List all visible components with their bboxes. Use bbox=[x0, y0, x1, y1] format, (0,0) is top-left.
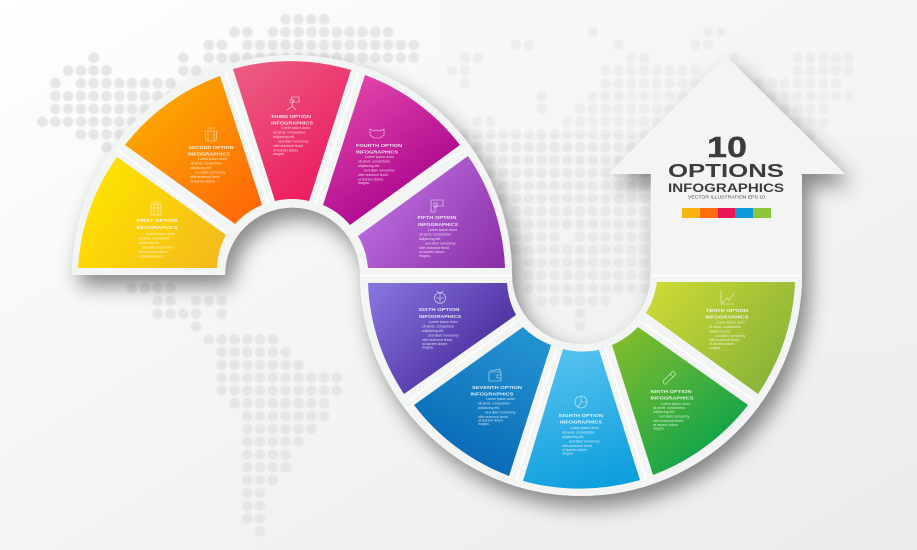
heading: sixth option: SIXTH OPTION bbox=[418, 307, 460, 312]
heading: seventh option bbox=[470, 385, 523, 396]
body text: ninth option: adipiscing elit, bbox=[653, 410, 675, 414]
heading: eighth option: INFOGRAPHICS bbox=[560, 420, 602, 424]
heading: second option: INFOGRAPHICS bbox=[188, 152, 230, 156]
body text: sixth option: magna. bbox=[422, 346, 434, 350]
body text: eighth option: nibh euismod tincid bbox=[562, 444, 592, 448]
body text: ninth option: ut laoreet dolore bbox=[653, 423, 678, 427]
body text: first option: adipiscing elit, bbox=[138, 241, 160, 245]
body text: eighth option: magna. bbox=[562, 452, 574, 456]
heading: tenth option: INFOGRAPHICS bbox=[706, 314, 748, 320]
body text: ninth option: nibh euismod tincid bbox=[653, 419, 683, 423]
heading: third option: INFOGRAPHICS bbox=[271, 120, 313, 126]
body text: first option: nibh euismod tincid bbox=[138, 250, 168, 254]
heading: fourth option: FOURTH OPTION bbox=[356, 143, 403, 148]
panel: sixth option bbox=[368, 283, 516, 394]
body text: seventh option: ut laoreet dolore bbox=[478, 418, 503, 422]
body text: third option: nibh euismod tincid bbox=[273, 144, 303, 148]
body text: seventh option: sit amet, consectetur bbox=[478, 402, 511, 406]
body text: first option: Lorem ipsum dolor bbox=[146, 232, 176, 236]
panel: seventh option bbox=[414, 327, 551, 476]
heading: ninth option: NINTH OPTION bbox=[650, 389, 692, 394]
heading: first option: FIRST OPTION bbox=[136, 218, 178, 223]
heading: seventh option: INFOGRAPHICS bbox=[470, 392, 514, 396]
body text: fifth option: adipiscing elit, bbox=[419, 237, 441, 241]
body text: fourth option: magna. bbox=[358, 181, 370, 185]
body text: tenth option: Lorem ipsum dolor bbox=[716, 320, 746, 324]
body text: first option: ut laoreet dolore bbox=[138, 254, 163, 258]
panel: tenth option bbox=[646, 282, 795, 394]
body text: sixth option: nibh euismod tincid bbox=[422, 338, 452, 342]
heading: second option: SECOND OPTION bbox=[188, 145, 234, 150]
body text: eighth option: adipiscing elit, bbox=[562, 435, 584, 439]
body text: tenth option: nibh euismod tincid bbox=[709, 338, 739, 342]
body text: seventh option: nibh euismod tincid bbox=[478, 415, 508, 419]
body text: third option: Lorem ipsum dolor bbox=[281, 126, 311, 130]
icon: sixth option bbox=[434, 291, 446, 304]
body text: tenth option: ut laoreet dolore bbox=[709, 342, 734, 346]
body text: third option: ut laoreet dolore bbox=[273, 148, 298, 152]
body text: sixth option: adipiscing elit, bbox=[422, 329, 444, 333]
body text: ninth option: magna. bbox=[653, 426, 665, 430]
heading: third option: THIRD OPTION bbox=[271, 114, 312, 119]
heading: fourth option bbox=[356, 143, 403, 154]
body text: third option: sed diam nonummy bbox=[278, 140, 309, 144]
body text: fifth option: nibh euismod tincid bbox=[419, 246, 449, 250]
heading: third option bbox=[271, 114, 313, 126]
icon: first option bbox=[151, 202, 161, 215]
body text: ninth option: Lorem ipsum dolor bbox=[661, 402, 691, 406]
body text: eighth option: Lorem ipsum dolor bbox=[570, 426, 600, 430]
caption: vector illustration: VECTOR ILLUSTRATION EPS 10 bbox=[688, 194, 766, 200]
body text: seventh option: Lorem ipsum dolor bbox=[486, 397, 516, 401]
heading: fourth option: INFOGRAPHICS bbox=[356, 150, 398, 154]
body text: first option: sit amet, consectetur bbox=[138, 236, 171, 240]
heading: eighth option: EIGHTH OPTION bbox=[559, 413, 604, 418]
subtitle: INFOGRAPHICS: INFOGRAPHICS bbox=[668, 181, 784, 195]
body text: seventh option: sed diam nonummy bbox=[485, 410, 516, 414]
body text: ninth option: sit amet, consectetur bbox=[653, 406, 686, 410]
body text: third option: magna. bbox=[273, 152, 285, 156]
icon: seventh option bbox=[489, 369, 501, 381]
heading: ninth option: INFOGRAPHICS bbox=[650, 396, 694, 400]
body text: seventh option: adipiscing elit, bbox=[478, 406, 500, 410]
heading: tenth option: TENTH OPTION bbox=[706, 308, 749, 313]
icon: ninth option bbox=[663, 371, 676, 384]
colour bar bbox=[682, 208, 771, 218]
icon: second option bbox=[205, 128, 217, 141]
heading: ninth option bbox=[650, 389, 694, 400]
panel: third option bbox=[233, 61, 351, 201]
heading: sixth option: INFOGRAPHICS bbox=[419, 314, 461, 319]
body text: eighth option: ut laoreet dolore bbox=[562, 448, 587, 452]
heading: fifth option: FIFTH OPTION bbox=[418, 215, 457, 220]
heading: tenth option bbox=[706, 308, 749, 320]
body text: eighth option: sit amet, consectetur bbox=[562, 430, 595, 434]
body text: eighth option: sed diam nonummy bbox=[569, 440, 600, 444]
body text: tenth option: magna. bbox=[709, 346, 721, 350]
panel: eighth option bbox=[523, 349, 640, 489]
body text: fifth option: ut laoreet dolore bbox=[419, 250, 444, 254]
body text: fourth option: sed diam nonummy bbox=[364, 168, 395, 172]
body text: tenth option: sit amet, consectetur bbox=[709, 325, 742, 329]
heading: fifth option bbox=[418, 215, 458, 227]
body text: second option: sed diam nonummy bbox=[195, 170, 226, 174]
body text: seventh option: magna. bbox=[478, 422, 490, 426]
heading: fifth option: INFOGRAPHICS bbox=[418, 222, 458, 227]
panel: fourth option bbox=[323, 75, 460, 225]
icon: third option bbox=[287, 97, 299, 110]
body text: fifth option: sit amet, consectetur bbox=[419, 232, 452, 236]
body text: second option: sit amet, consectetur bbox=[190, 162, 223, 166]
body text: tenth option: adipiscing elit, bbox=[709, 330, 731, 334]
heading: sixth option bbox=[418, 307, 461, 319]
body text: second option: adipiscing elit, bbox=[190, 166, 212, 170]
body text: second option: Lorem ipsum dolor bbox=[198, 157, 228, 161]
body text: third option: adipiscing elit, bbox=[273, 135, 295, 139]
body text: fifth option: Lorem ipsum dolor bbox=[428, 228, 458, 232]
body text: fifth option: sed diam nonummy bbox=[425, 242, 456, 246]
heading: second option bbox=[188, 145, 234, 156]
icon: tenth option bbox=[721, 291, 734, 304]
body text: tenth option: sed diam nonummy bbox=[715, 334, 746, 338]
body text: fourth option: ut laoreet dolore bbox=[358, 178, 383, 182]
body text: fourth option: nibh euismod tincid bbox=[358, 173, 388, 177]
body text: second option: nibh euismod tincid bbox=[190, 175, 220, 179]
body text: second option: ut laoreet dolore bbox=[190, 180, 215, 184]
body text: fourth option: adipiscing elit, bbox=[358, 164, 380, 168]
body text: sixth option: sed diam nonummy bbox=[428, 334, 459, 338]
body text: fourth option: sit amet, consectetur bbox=[358, 160, 391, 164]
body text: sixth option: Lorem ipsum dolor bbox=[429, 320, 459, 324]
title block on arrow bbox=[668, 132, 784, 218]
panel: second option bbox=[125, 76, 262, 224]
icon: eighth option bbox=[575, 396, 587, 408]
heading: first option bbox=[136, 218, 178, 230]
title number: 10: 10 bbox=[707, 132, 747, 164]
body text: fifth option: magna. bbox=[419, 254, 431, 258]
white S-shaped ribbon with arrow bbox=[72, 55, 845, 496]
icon: fifth option bbox=[431, 200, 443, 212]
panel: ninth option bbox=[612, 327, 748, 475]
heading: seventh option: SEVENTH OPTION bbox=[472, 385, 523, 390]
body text: first option: sed diam nonummy bbox=[142, 246, 173, 250]
title: OPTIONS: OPTIONS bbox=[668, 161, 784, 181]
icon: fourth option bbox=[370, 129, 384, 138]
body text: fourth option: Lorem ipsum dolor bbox=[365, 155, 395, 159]
heading: eighth option bbox=[559, 413, 604, 424]
body text: ninth option: sed diam nonummy bbox=[659, 414, 690, 418]
body text: third option: sit amet, consectetur bbox=[273, 130, 306, 134]
body text: sixth option: ut laoreet dolore bbox=[422, 342, 447, 346]
heading: first option: INFOGRAPHICS bbox=[136, 225, 178, 230]
body text: sixth option: sit amet, consectetur bbox=[422, 324, 455, 328]
panel: fifth option bbox=[358, 156, 505, 268]
panel: first option bbox=[78, 157, 226, 268]
